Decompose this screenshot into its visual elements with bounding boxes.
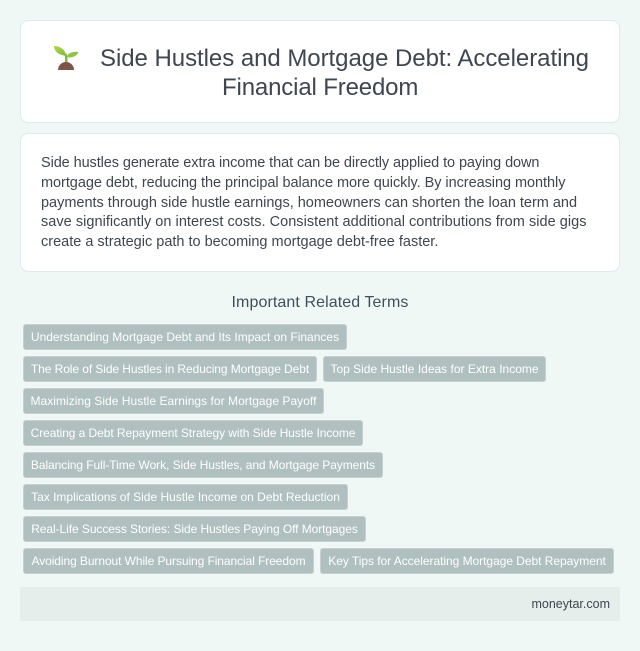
tag: Balancing Full-Time Work, Side Hustles, and Mortgage Payments bbox=[31, 458, 375, 472]
tag: Real-Life Success Stories: Side Hustles Paying Off Mortgages bbox=[31, 522, 358, 536]
intro paragraph: Side hustles generate extra income that can be directly applied to paying down bbox=[41, 155, 539, 171]
tag bbox=[23, 356, 317, 382]
intro paragraph: create a strategic path to becoming mortgage debt-free faster. bbox=[41, 234, 438, 250]
tag bbox=[23, 324, 347, 350]
panel: footer bbox=[20, 587, 620, 621]
tag bbox=[23, 484, 348, 510]
intro paragraph: mortgage debt, reducing the principal balance more quickly. By increasing monthly bbox=[41, 175, 565, 191]
panel: title card bbox=[20, 20, 620, 123]
tag: Tax Implications of Side Hustle Income on Debt Reduction bbox=[31, 490, 340, 504]
tag bbox=[23, 420, 363, 446]
source text: moneytar.com bbox=[531, 597, 610, 611]
tag: Maximizing Side Hustle Earnings for Mortgage Payoff bbox=[31, 394, 316, 408]
intro paragraph bbox=[41, 155, 586, 250]
tag bbox=[23, 452, 383, 478]
intro paragraph: save significantly on interest costs. Consistent additional contributions from side gigs bbox=[41, 214, 586, 230]
tag bbox=[320, 548, 614, 574]
title line 1: Side Hustles and Mortgage Debt: Accelerating bbox=[100, 45, 589, 72]
tag bbox=[323, 356, 546, 382]
tag: Understanding Mortgage Debt and Its Impact on Finances bbox=[31, 330, 339, 344]
panel: intro text card bbox=[20, 133, 620, 272]
tag bbox=[23, 548, 314, 574]
heading: important related terms: Important Related Terms bbox=[232, 294, 408, 311]
tag bbox=[23, 388, 324, 414]
tag: Creating a Debt Repayment Strategy with Side Hustle Income bbox=[31, 426, 355, 440]
icon: seedling bbox=[54, 46, 78, 70]
intro paragraph: payments through side hustle earnings, homeowners can shorten the loan term and bbox=[41, 195, 577, 211]
tag bbox=[23, 516, 366, 542]
tag: Top Side Hustle Ideas for Extra Income bbox=[330, 362, 539, 376]
panel: related term tags bbox=[23, 324, 614, 574]
tag: Key Tips for Accelerating Mortgage Debt Repayment bbox=[328, 554, 606, 568]
title line 2: Financial Freedom bbox=[222, 74, 418, 101]
tag: Avoiding Burnout While Pursuing Financial Freedom bbox=[31, 554, 306, 568]
tag: The Role of Side Hustles in Reducing Mortgage Debt bbox=[31, 362, 309, 376]
